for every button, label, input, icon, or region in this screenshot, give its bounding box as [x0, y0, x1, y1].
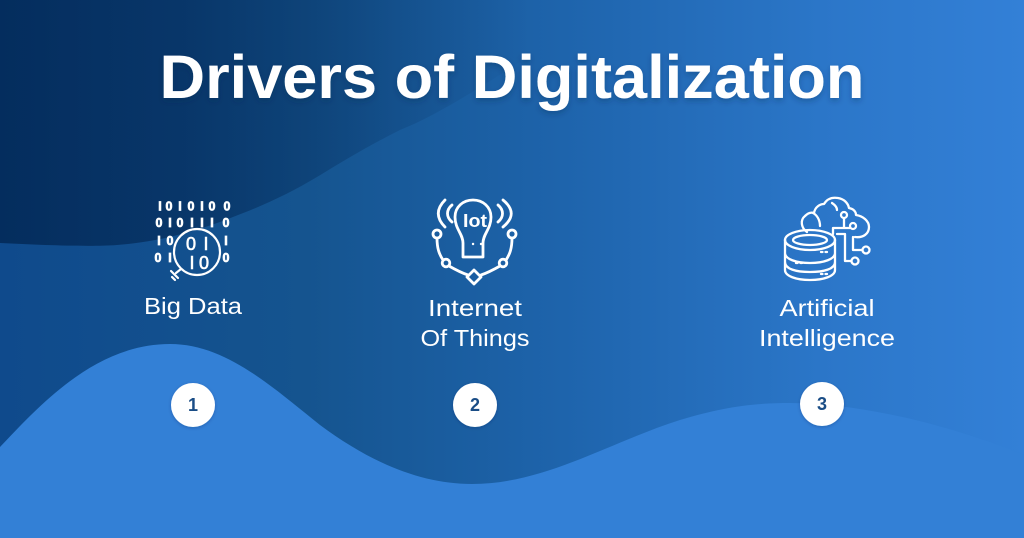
label: Artificial Intelligence: Intelligence	[759, 325, 895, 351]
icon: binary data with magnifier	[155, 200, 231, 280]
number badge 1: 1	[188, 395, 198, 415]
dark wave top left	[0, 0, 530, 246]
number badge 3: 3	[817, 394, 827, 414]
icon: binary data with magnifier: 0I0	[155, 251, 230, 265]
icon: binary data with magnifier: I0I0I00	[158, 200, 231, 214]
icon: binary data with magnifier: 0I	[186, 234, 209, 254]
icon: binary data with magnifier: I0I	[157, 234, 228, 248]
label: Artificial Intelligence: Artificial	[780, 295, 874, 321]
title: Drivers of Digitalization	[160, 43, 864, 111]
number badge 1	[171, 383, 215, 427]
light wave bottom	[0, 344, 1024, 538]
icon: binary data with magnifier: I0	[189, 253, 209, 273]
label: Artificial Intelligence	[759, 295, 895, 351]
number badge 2	[453, 383, 497, 427]
column: Internet Of Things	[420, 200, 530, 351]
label: Internet Of Things: Internet	[428, 295, 523, 321]
number badge 3	[800, 382, 844, 426]
icon: binary data with magnifier: 0I0III0	[156, 216, 230, 230]
label: Internet Of Things	[420, 295, 530, 351]
label: Internet Of Things: Of Things	[420, 325, 530, 351]
column: Big Data	[144, 200, 242, 319]
icon: IoT light bulb	[433, 200, 516, 284]
label: Big Data: Big Data	[144, 293, 242, 319]
number badge 2: 2	[470, 395, 480, 415]
column: Artificial Intelligence	[759, 198, 895, 351]
icon: database with cloud circuit	[785, 198, 870, 280]
icon: IoT light bulb: Iot	[463, 211, 487, 231]
